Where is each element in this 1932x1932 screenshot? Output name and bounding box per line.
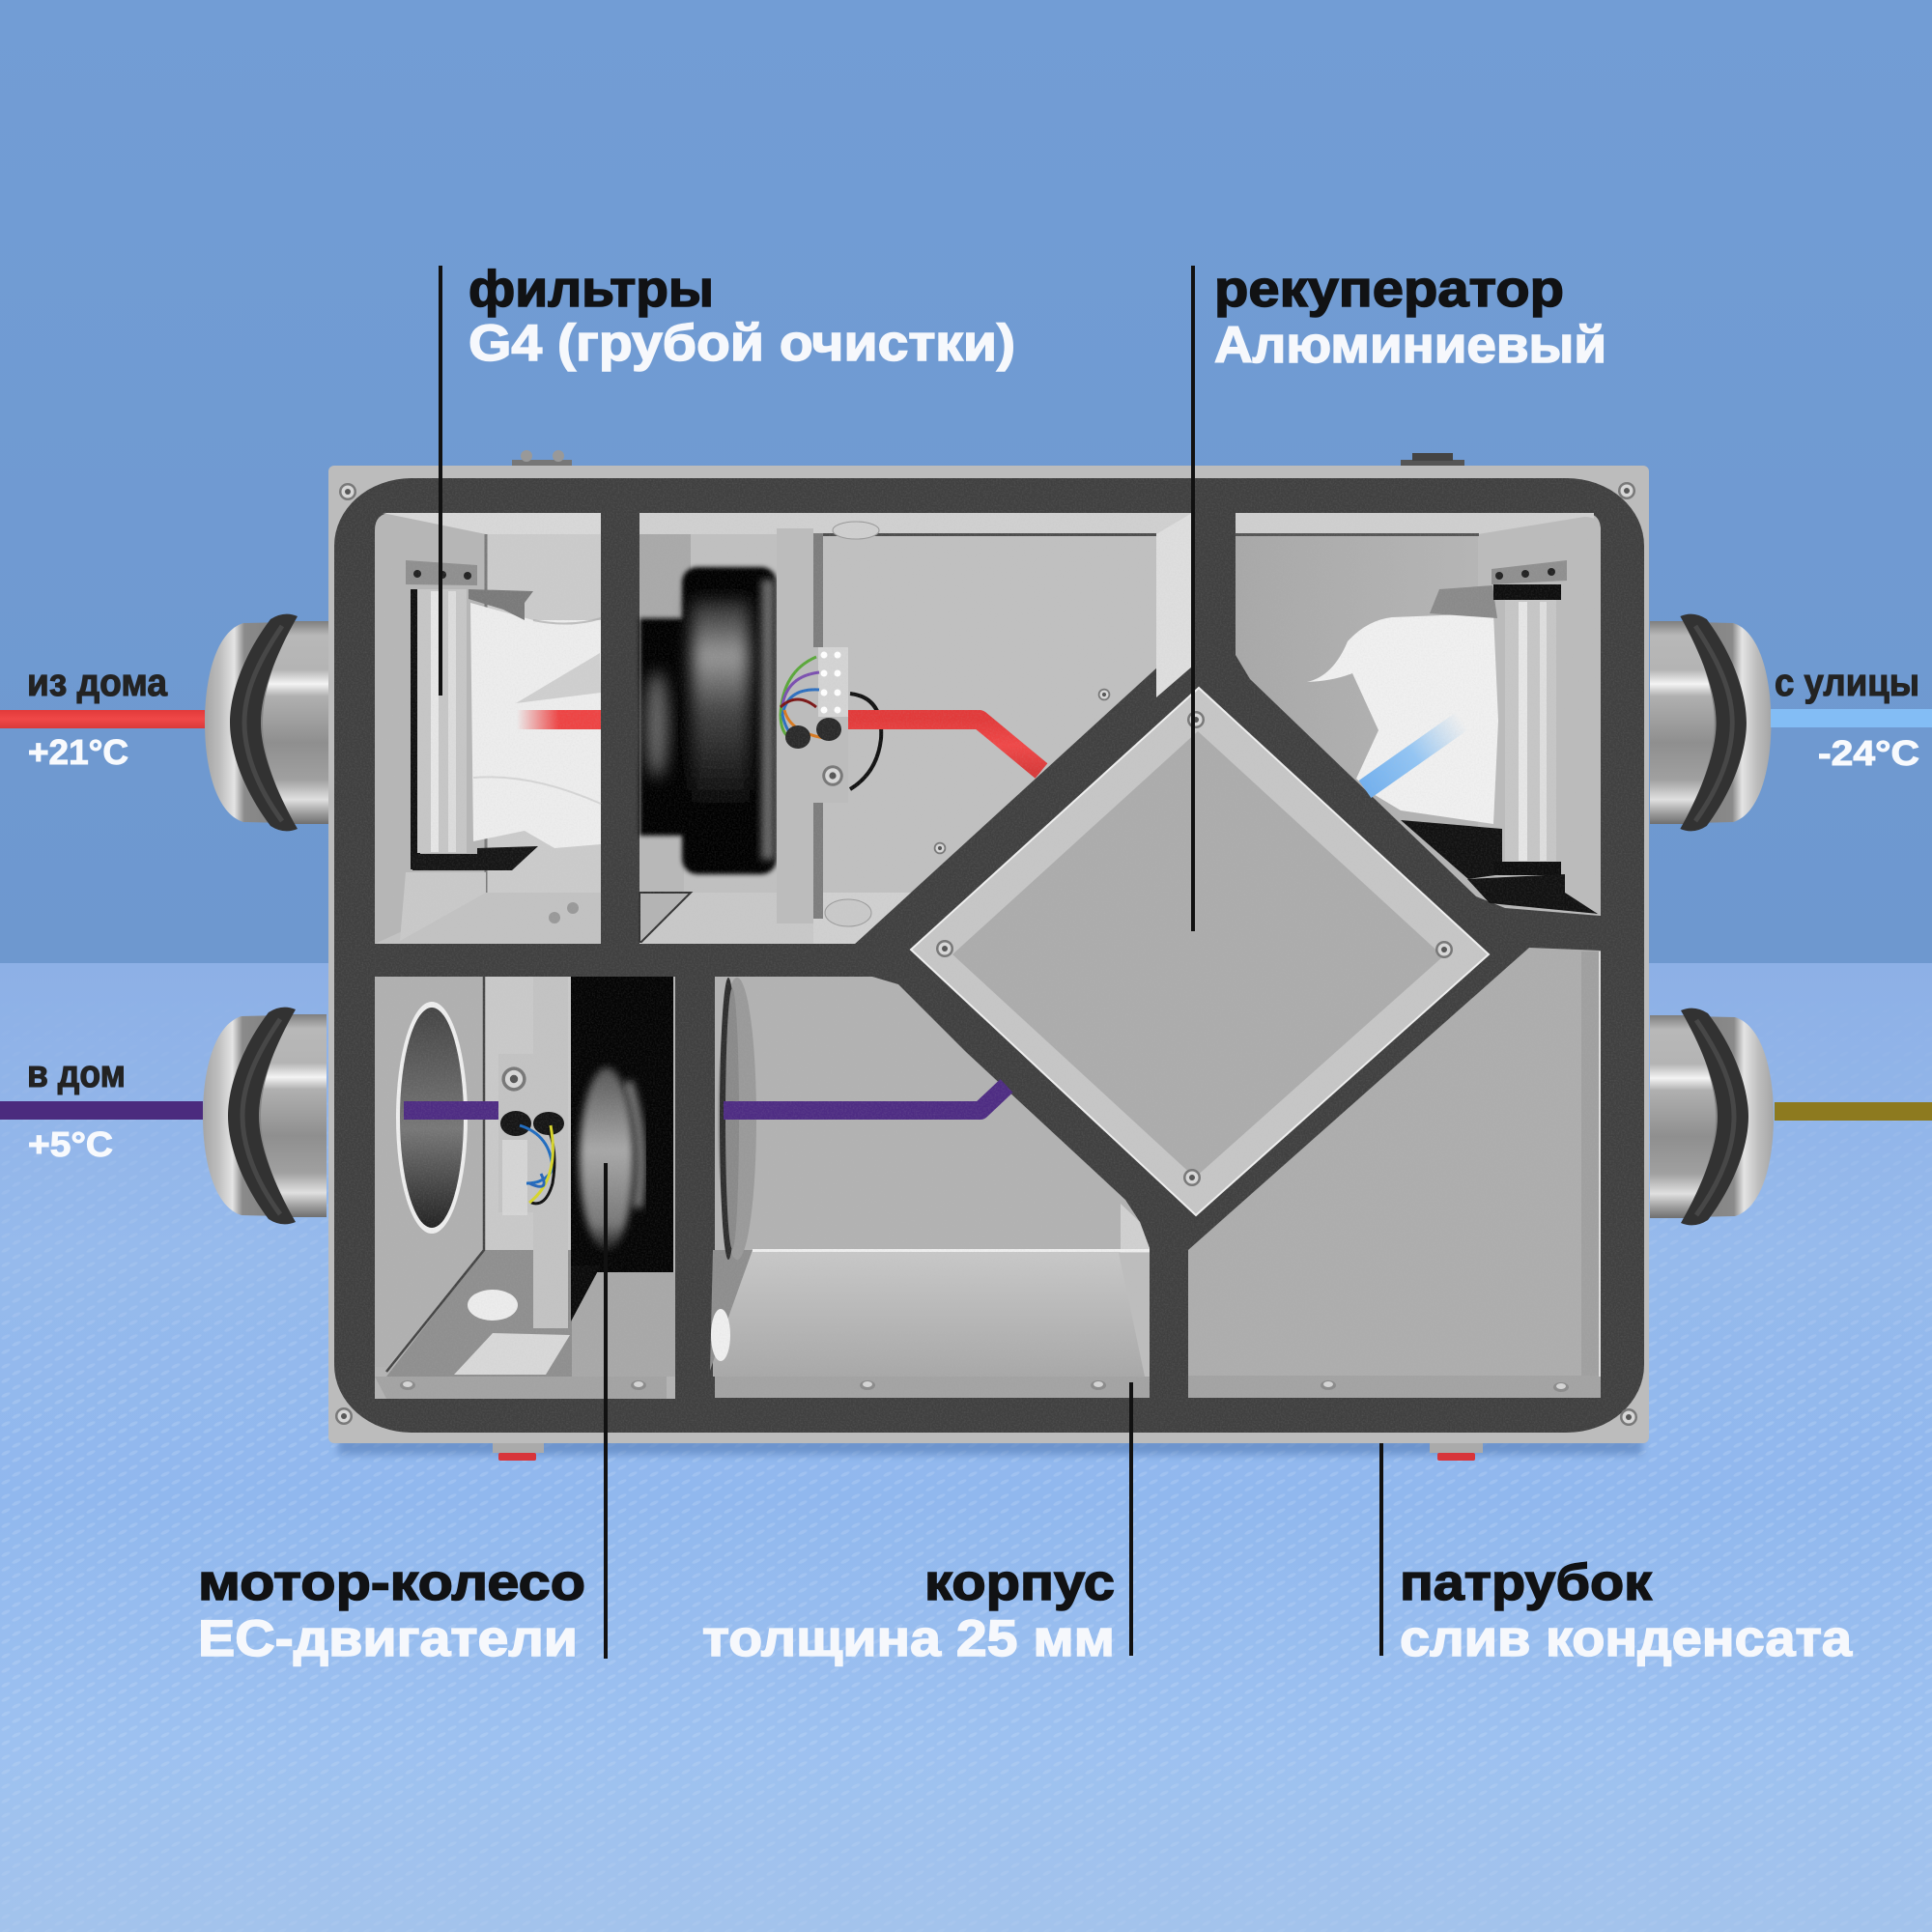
leader line: housing [1129,1382,1133,1656]
compartment: exhaust, bottom right [1188,948,1601,1398]
duct: upper right [1650,614,1771,831]
grommet [711,1309,730,1361]
label: motor wheel [198,1554,585,1667]
motor mounting plate [498,977,568,1328]
round opening, fan side [718,978,756,1260]
fan wheel, lower [571,977,673,1321]
leader line: recuperator [1191,266,1195,931]
label: housing [702,1554,1115,1667]
grain overlay [334,478,1644,1433]
compartment: supply fan, bottom left [375,977,675,1399]
flow label: from street: с улицы [1775,662,1919,704]
wires and terminal [500,1111,564,1215]
air arrow to fan [724,1086,1007,1111]
flow label: to house: +5°C [28,1124,113,1164]
background: floor [0,963,1932,1932]
round opening [396,1002,468,1234]
extract filter [400,560,601,941]
duct: upper left [205,614,328,831]
fan wheel, upper [639,567,777,874]
background: wall [0,0,1932,963]
label: recuperator: рекуператор [1214,261,1564,318]
flow label: from house: +21°C [28,732,128,772]
flow label: from street [1775,662,1919,773]
label: housing: корпус [924,1554,1115,1611]
casing shadow [338,1437,1642,1455]
flow label: to house: в дом [27,1053,126,1095]
label: condensate pipe [1400,1554,1853,1667]
duct: lower left [203,1008,327,1224]
mounting foot: bottom left [493,1441,544,1461]
flow label: from house [27,662,168,772]
label: filters [469,261,1015,372]
motor mounting plate [777,528,848,923]
mounting clamp: top left [512,450,572,467]
leader line: filters [439,266,442,696]
label: condensate pipe: патрубок [1400,1554,1653,1611]
label: filters: фильтры [469,261,714,318]
heat exchanger core [911,688,1489,1215]
insulation frame [334,478,1644,1433]
leader line: motor wheel [604,1163,608,1659]
duct: lower right [1650,1009,1774,1225]
leader line: condensate [1379,1443,1383,1656]
air arrow inside intake filter [1365,721,1463,789]
air arrow inside filter [517,710,601,729]
rating label [454,1333,570,1375]
label: condensate pipe: слив конденсата [1400,1610,1853,1667]
grommets [833,522,879,539]
outside arrow: to house [0,1101,203,1120]
compartment: intake filter, top right [1236,513,1601,916]
flow label: from street: -24°C [1818,733,1919,773]
bottom lip [375,1377,667,1399]
flow label: from house: из дома [27,662,168,704]
label: filters: G4 (грубой очистки) [469,315,1015,372]
mounting clamp: top right [1401,453,1464,467]
outside arrow: to street [1775,1102,1932,1121]
bottom lip [715,1377,1150,1398]
grommet [468,1290,518,1321]
flow label: to house [27,1053,126,1164]
compartment: supply fan, top middle [639,513,1192,944]
recuperator unit [328,466,1649,1443]
label: housing: толщина 25 мм [702,1610,1115,1667]
casing [328,466,1649,1443]
label: motor wheel: мотор-колесо [198,1554,585,1611]
air arrow, extract to recuperator [848,720,1041,771]
label: motor wheel: ЕС-двигатели [198,1610,578,1667]
label: recuperator [1214,261,1606,374]
compartment: filter, top left [375,513,601,944]
corner screws [335,482,1637,1426]
outdoor filter [1307,560,1598,914]
outside arrow: from street [1771,709,1932,727]
label: recuperator: Алюминиевый [1214,317,1606,374]
compartment: supply air, bottom middle [710,977,1150,1398]
mounting foot: bottom right [1430,1441,1483,1461]
air arrow before fan [404,1101,500,1120]
terminal block and wires [781,647,881,789]
outside arrow: from house [0,710,205,728]
